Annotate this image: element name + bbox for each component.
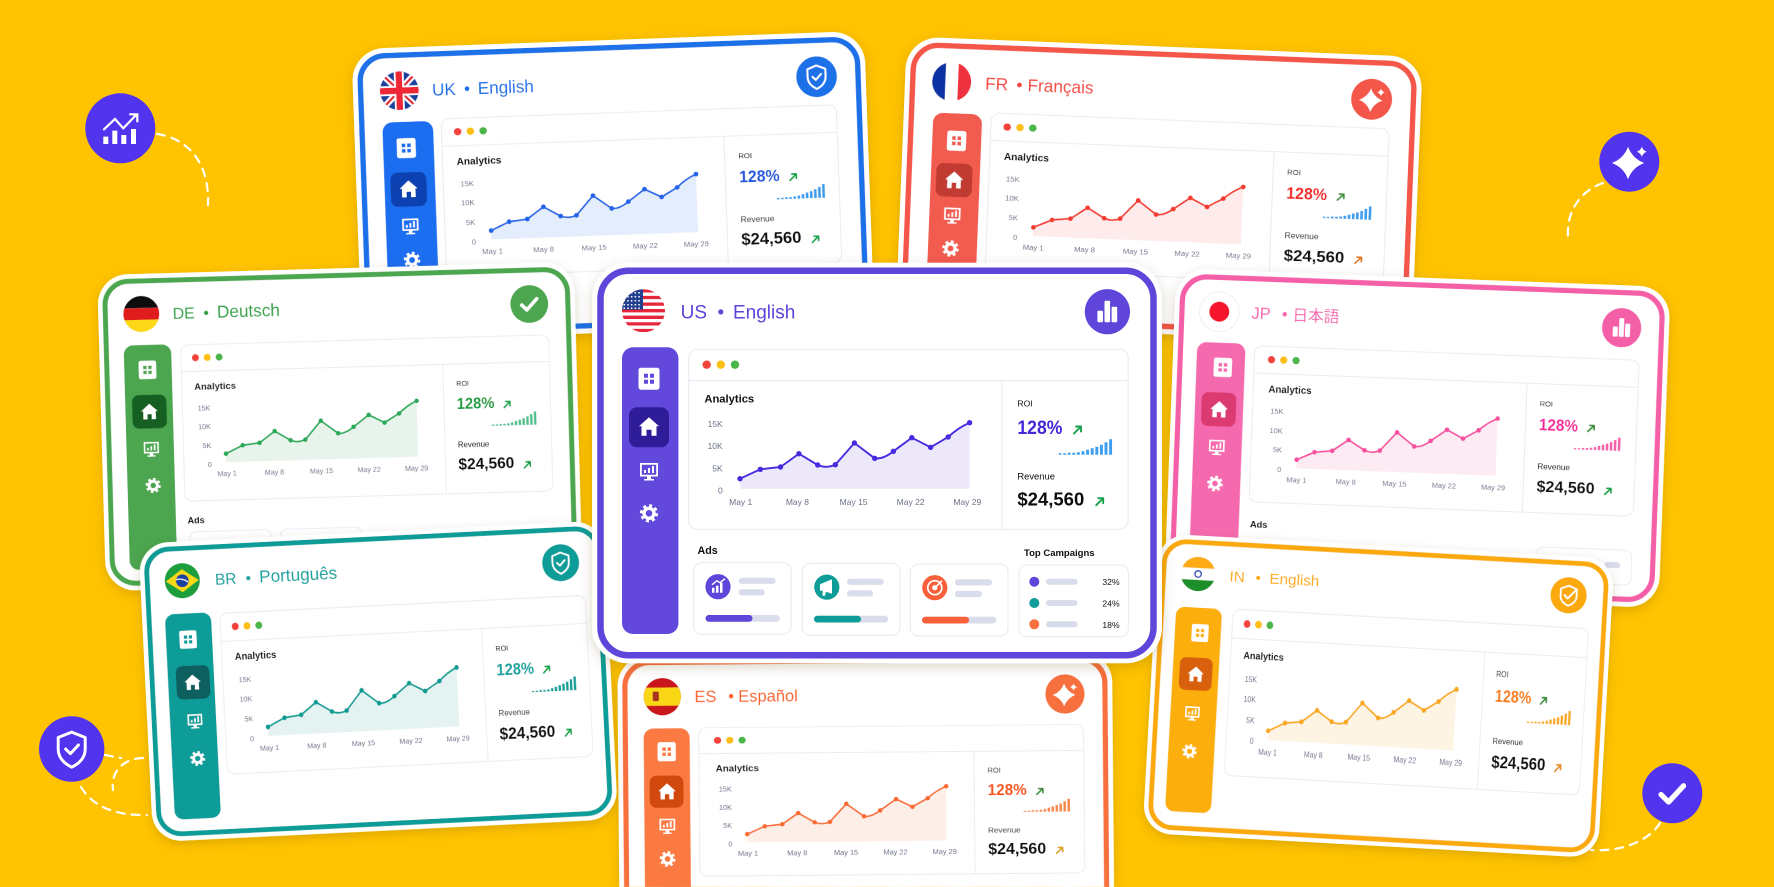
badge: bar chart bbox=[1601, 307, 1642, 348]
stat: ROI bbox=[1494, 669, 1572, 725]
line chart: May 15 bbox=[840, 497, 868, 507]
stat: Revenue: $24,560 bbox=[988, 841, 1047, 858]
badge: shield bbox=[796, 56, 838, 98]
stat: ROI bbox=[495, 640, 575, 694]
stat: Revenue: Revenue bbox=[740, 213, 775, 224]
card title: Português bbox=[259, 563, 338, 587]
stat: ROI: ROI bbox=[738, 151, 752, 161]
line chart: May 22 bbox=[897, 497, 925, 507]
dashed connector: chart icon bbox=[157, 134, 208, 205]
stat: Revenue bbox=[1017, 470, 1103, 509]
line chart: Analytics bbox=[716, 763, 759, 774]
line chart bbox=[1238, 650, 1468, 768]
card: DE Deutsch bbox=[97, 262, 583, 591]
line chart: May 8 bbox=[533, 245, 554, 254]
badge: shield bbox=[541, 543, 580, 582]
flag: Japan bbox=[1199, 291, 1240, 332]
dashboard window bbox=[220, 595, 593, 774]
line chart: May 22 bbox=[1432, 481, 1456, 491]
stat: ROI: ROI bbox=[456, 379, 469, 388]
line chart: May 1 bbox=[482, 246, 503, 256]
stat: ROI: ROI bbox=[495, 643, 508, 653]
window dots bbox=[1003, 123, 1037, 132]
line chart: May 15 bbox=[310, 467, 333, 476]
stat: Revenue bbox=[1491, 736, 1562, 776]
line chart: May 22 bbox=[1174, 249, 1200, 259]
stat: ROI: 128% bbox=[1539, 416, 1579, 435]
line chart: May 1 bbox=[1023, 243, 1044, 253]
line chart: May 29 bbox=[1226, 251, 1251, 261]
line chart: May 1 bbox=[217, 470, 237, 478]
stat: Revenue: $24,560 bbox=[1536, 478, 1595, 498]
flag: Brazil bbox=[163, 562, 201, 600]
ads heading: Ads bbox=[698, 545, 718, 557]
line chart: 15K bbox=[1270, 407, 1284, 416]
line chart: May 15 bbox=[581, 243, 607, 252]
line chart: May 29 bbox=[933, 847, 957, 856]
floating icon: shield bbox=[39, 716, 104, 782]
stat: ROI bbox=[1017, 399, 1111, 455]
card title: BR bbox=[215, 571, 237, 589]
ad card: megaphone bbox=[802, 563, 900, 635]
line chart: May 22 bbox=[633, 241, 658, 251]
stat: Revenue: $24,560 bbox=[458, 455, 515, 474]
line chart: 0 bbox=[1249, 736, 1254, 746]
line chart: May 1 bbox=[1258, 747, 1277, 758]
stat: Revenue: Revenue bbox=[1492, 736, 1524, 748]
card title: • bbox=[718, 302, 724, 323]
line chart: 0 bbox=[250, 734, 254, 743]
line chart: 5K bbox=[1009, 213, 1018, 222]
line chart bbox=[235, 640, 470, 754]
line chart: May 1 bbox=[729, 497, 753, 507]
flag: US bbox=[622, 289, 666, 333]
line chart: 10K bbox=[719, 803, 732, 812]
line chart: May 29 bbox=[953, 497, 982, 507]
stat: ROI: ROI bbox=[1496, 669, 1509, 680]
dashboard window bbox=[181, 335, 553, 501]
stat: ROI: 128% bbox=[1286, 184, 1327, 204]
stat: Revenue: $24,560 bbox=[1017, 488, 1084, 509]
line chart: 15K bbox=[460, 179, 474, 188]
dashboard window bbox=[1224, 609, 1589, 795]
stat: ROI bbox=[987, 765, 1069, 812]
floating icon: sparkle bbox=[1599, 132, 1659, 192]
card title: • bbox=[1255, 570, 1261, 587]
line chart: Analytics bbox=[457, 155, 502, 168]
card title: ES bbox=[694, 688, 717, 706]
line chart: 15K bbox=[1244, 674, 1257, 684]
stat: Revenue: Revenue bbox=[988, 825, 1021, 834]
badge: sparkle bbox=[1045, 674, 1085, 714]
top campaigns panel bbox=[1019, 565, 1128, 637]
stat: ROI bbox=[738, 149, 824, 201]
top campaigns panel: 32% bbox=[1102, 577, 1120, 587]
stat: ROI: ROI bbox=[1017, 399, 1033, 409]
line chart: Analytics bbox=[235, 650, 277, 663]
window dots bbox=[1268, 356, 1300, 364]
line chart: 0 bbox=[472, 237, 476, 246]
line chart: Analytics bbox=[1243, 650, 1284, 664]
card title: FR bbox=[985, 73, 1009, 94]
ad card: analytics bbox=[694, 563, 791, 634]
sidebar bbox=[1165, 606, 1222, 813]
badge: check bbox=[510, 285, 549, 323]
stat: Revenue: $24,560 bbox=[499, 723, 556, 743]
line chart: 0 bbox=[728, 840, 732, 849]
stat: Revenue bbox=[1536, 462, 1612, 499]
stat: ROI: ROI bbox=[987, 766, 1001, 775]
stat: ROI bbox=[1538, 399, 1621, 451]
card title: • bbox=[728, 688, 734, 706]
dashboard window bbox=[699, 725, 1085, 876]
line chart: May 15 bbox=[352, 738, 375, 748]
badge: shield check bbox=[1550, 576, 1588, 614]
line chart: May 8 bbox=[787, 848, 807, 857]
ads heading: Ads bbox=[188, 515, 205, 526]
stat: Revenue: Revenue bbox=[1537, 462, 1571, 473]
line chart: May 1 bbox=[738, 849, 758, 858]
window dots bbox=[454, 127, 487, 136]
line chart: Analytics bbox=[194, 380, 236, 393]
window dots bbox=[1243, 620, 1274, 629]
card title: 日本語 bbox=[1292, 307, 1340, 326]
dashboard window bbox=[689, 349, 1128, 529]
dashed connector: sparkle icon bbox=[1568, 183, 1603, 237]
line chart bbox=[716, 762, 957, 858]
line chart: Analytics bbox=[1004, 152, 1050, 164]
line chart: May 8 bbox=[265, 468, 284, 477]
sidebar bbox=[124, 344, 177, 570]
stat: Revenue bbox=[988, 825, 1063, 858]
card title: English bbox=[1269, 571, 1320, 590]
dashboard window bbox=[1249, 346, 1639, 516]
sidebar bbox=[622, 347, 678, 634]
line chart: May 8 bbox=[1074, 245, 1095, 255]
line chart: May 29 bbox=[1481, 482, 1505, 492]
card title: Deutsch bbox=[217, 300, 280, 322]
line chart: 15K bbox=[238, 674, 252, 684]
dashboard window bbox=[985, 113, 1389, 285]
line chart: May 8 bbox=[1336, 477, 1356, 487]
stat: ROI: 128% bbox=[1494, 686, 1532, 708]
ad card placeholders bbox=[190, 527, 363, 565]
card title: English bbox=[477, 77, 534, 98]
stat: ROI: 128% bbox=[457, 395, 495, 413]
stat: ROI: ROI bbox=[1540, 399, 1553, 409]
top campaigns panel: 24% bbox=[1102, 598, 1120, 608]
line chart: May 29 bbox=[446, 733, 470, 744]
line chart: May 29 bbox=[684, 239, 709, 249]
card title: Français bbox=[1027, 75, 1094, 98]
card: BR Português bbox=[138, 521, 618, 842]
stat: Revenue bbox=[1283, 230, 1362, 267]
card title: IN bbox=[1229, 568, 1245, 586]
stat: ROI: ROI bbox=[1287, 168, 1301, 177]
flag: France bbox=[932, 63, 972, 100]
line chart: 15K bbox=[719, 785, 732, 794]
card title: English bbox=[733, 302, 795, 323]
line chart: 0 bbox=[1277, 465, 1281, 474]
badge: bar chart bbox=[1085, 289, 1130, 334]
line chart bbox=[194, 375, 428, 479]
line chart: Analytics bbox=[704, 393, 754, 405]
floating icon: check bbox=[1642, 763, 1702, 823]
card title: DE bbox=[172, 305, 195, 323]
stat: Revenue: Revenue bbox=[1284, 230, 1319, 241]
card title: • bbox=[464, 79, 470, 99]
line chart: May 8 bbox=[307, 740, 327, 751]
dashed connector: check icon bbox=[1591, 823, 1660, 850]
flag: Germany bbox=[122, 295, 160, 333]
stat: Revenue bbox=[458, 439, 530, 474]
sidebar bbox=[926, 113, 982, 309]
window dots bbox=[232, 621, 262, 630]
line chart: 15K bbox=[197, 404, 211, 413]
card: IN English bbox=[1142, 533, 1614, 858]
card title: • bbox=[245, 570, 251, 587]
window dots bbox=[714, 737, 746, 744]
top campaigns heading: Top Campaigns bbox=[1024, 548, 1095, 559]
window dots bbox=[192, 353, 223, 361]
line chart: 5K bbox=[202, 442, 212, 450]
line chart: 5K bbox=[723, 821, 732, 830]
stat: Revenue: Revenue bbox=[458, 440, 490, 450]
card title: Español bbox=[738, 688, 798, 706]
card: US English bbox=[592, 263, 1162, 663]
card: FR Français bbox=[895, 36, 1423, 344]
card title: US bbox=[681, 302, 707, 323]
line chart: 10K bbox=[198, 423, 211, 431]
stat: Revenue: Revenue bbox=[1017, 470, 1055, 481]
line chart: 5K bbox=[466, 218, 475, 227]
line chart bbox=[1265, 384, 1509, 492]
line chart: May 22 bbox=[399, 736, 423, 746]
line chart: 5K bbox=[1246, 715, 1255, 725]
card title: • bbox=[1016, 75, 1023, 95]
card title: • bbox=[1281, 306, 1288, 324]
ad card: target bbox=[910, 564, 1008, 636]
stat: ROI: 128% bbox=[1017, 418, 1062, 439]
card title: UK bbox=[432, 80, 456, 100]
stat: Revenue: $24,560 bbox=[1283, 247, 1345, 267]
line chart: 10K bbox=[708, 441, 723, 451]
line chart: May 1 bbox=[260, 743, 279, 753]
flag: Spain bbox=[643, 677, 682, 716]
stat: ROI bbox=[456, 377, 535, 427]
stat: ROI: 128% bbox=[988, 781, 1027, 799]
card: ES Español bbox=[617, 651, 1114, 887]
card: UK English bbox=[351, 31, 875, 341]
line chart: May 15 bbox=[834, 848, 858, 857]
flag: UK bbox=[379, 70, 420, 111]
line chart: 15K bbox=[708, 419, 723, 429]
line chart: May 8 bbox=[786, 497, 809, 507]
stat: Revenue bbox=[498, 705, 572, 743]
line chart: 0 bbox=[208, 461, 212, 469]
stat: ROI: 128% bbox=[739, 166, 780, 186]
sidebar bbox=[644, 728, 691, 887]
line chart: May 22 bbox=[1393, 755, 1416, 766]
line chart: May 15 bbox=[1123, 247, 1148, 257]
sidebar bbox=[1189, 342, 1246, 569]
line chart bbox=[457, 148, 709, 257]
line chart: May 29 bbox=[405, 464, 428, 473]
line chart: May 29 bbox=[1439, 757, 1462, 768]
stat: Revenue: $24,560 bbox=[1491, 753, 1546, 775]
line chart: 10K bbox=[1269, 426, 1283, 435]
line chart: 5K bbox=[1273, 445, 1282, 455]
stat: Revenue bbox=[740, 212, 819, 249]
ads heading: Ads bbox=[1250, 519, 1268, 530]
top campaigns panel: 18% bbox=[1102, 620, 1120, 630]
line chart bbox=[704, 393, 982, 507]
floating icon: growth chart bbox=[85, 93, 155, 163]
line chart: 15K bbox=[1006, 174, 1020, 184]
line chart: May 15 bbox=[1382, 479, 1407, 489]
line chart: May 22 bbox=[883, 848, 908, 857]
line chart: Analytics bbox=[1268, 384, 1312, 397]
stat: Revenue: $24,560 bbox=[741, 229, 802, 249]
flag: India bbox=[1182, 556, 1215, 592]
line chart: 10K bbox=[1005, 194, 1019, 203]
line chart bbox=[1000, 152, 1255, 261]
line chart: 0 bbox=[1013, 233, 1017, 242]
card title: • bbox=[203, 305, 209, 322]
line chart: 10K bbox=[1243, 695, 1256, 705]
line chart: 10K bbox=[461, 198, 475, 208]
dashboard window bbox=[441, 105, 842, 277]
line chart: 5K bbox=[712, 463, 723, 473]
line chart: 10K bbox=[239, 694, 253, 704]
dashed connector: shield icon bbox=[81, 755, 147, 815]
line chart: 5K bbox=[244, 714, 253, 724]
campaign panel bbox=[1535, 547, 1632, 585]
stat: ROI: 128% bbox=[496, 659, 535, 680]
stat: ROI bbox=[1285, 168, 1372, 220]
badge: sparkle bbox=[1350, 78, 1393, 121]
window dots bbox=[702, 360, 739, 369]
card: JP Japanese bbox=[1164, 268, 1671, 608]
sidebar bbox=[382, 121, 440, 325]
line chart: May 22 bbox=[357, 466, 381, 474]
line chart: 0 bbox=[718, 486, 723, 496]
sidebar bbox=[165, 612, 221, 820]
line chart: May 8 bbox=[1304, 750, 1323, 760]
line chart: May 15 bbox=[1347, 752, 1370, 763]
card title: JP bbox=[1251, 305, 1271, 324]
line chart: May 1 bbox=[1286, 475, 1307, 485]
stat: Revenue: Revenue bbox=[498, 707, 531, 718]
